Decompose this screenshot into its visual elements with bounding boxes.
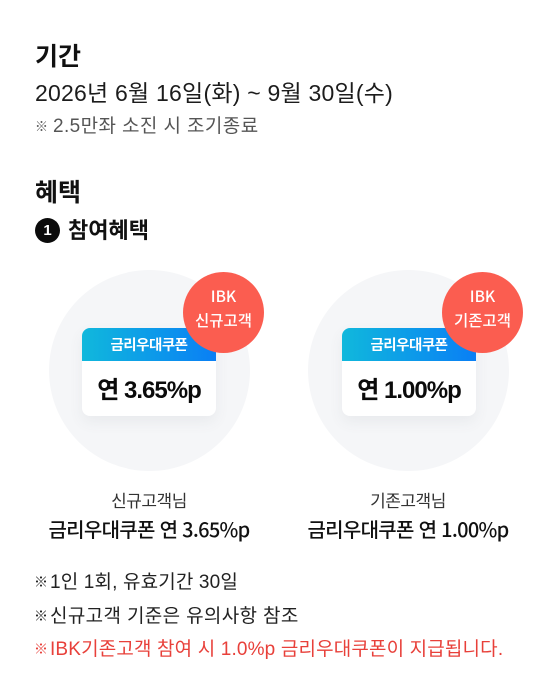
- note: new customer criteria: 신규고객 기준은 유의사항 참조: [50, 606, 299, 627]
- badge: IBK existing customer: [442, 272, 523, 353]
- coupon header: [342, 328, 476, 361]
- background circle: [308, 270, 509, 471]
- coupon header: 금리우대쿠폰: [370, 338, 448, 354]
- icon: number 1: 1: [43, 222, 52, 239]
- label: new customer: 신규고객님: [111, 492, 187, 511]
- note: existing customer coupon: ※: [34, 641, 48, 657]
- subheading: participation benefit: 참여혜택: [68, 218, 149, 243]
- badge: IBK new customer: 신규고객: [195, 309, 252, 331]
- coupon rate: 연 3.65%p: [97, 377, 201, 404]
- note: new customer criteria: ※: [34, 608, 48, 624]
- panel: new customer coupon: [49, 270, 264, 471]
- coupon card: [342, 328, 476, 416]
- badge: IBK existing customer: 기존고객: [454, 309, 511, 331]
- background circle: [49, 270, 250, 471]
- badge: IBK existing customer: IBK: [470, 285, 495, 307]
- coupon rate: 연 1.00%p: [357, 377, 461, 404]
- period note: 2.5만좌 소진 시 조기종료: [53, 116, 259, 137]
- badge: IBK new customer: IBK: [211, 285, 236, 307]
- coupon card: [82, 328, 216, 416]
- period dates: 2026년 6월 16일(화) ~ 9월 30일(수): [35, 80, 393, 106]
- icon: number 1: [35, 218, 60, 243]
- note: existing customer coupon: IBK기존고객 참여 시 1.0%p 금리우대쿠폰이 지급됩니다.: [50, 639, 503, 660]
- heading: period: 기간: [35, 43, 81, 71]
- value: new customer coupon: 금리우대쿠폰 연 3.65%p: [48, 514, 250, 543]
- badge: IBK new customer: [183, 272, 264, 353]
- coupon header: [82, 328, 216, 361]
- note: one per person: 1인 1회, 유효기간 30일: [50, 572, 238, 593]
- value: existing customer coupon: 금리우대쿠폰 연 1.00%p: [307, 514, 509, 543]
- coupon header: 금리우대쿠폰: [110, 338, 188, 354]
- period note: ※: [35, 119, 48, 134]
- note: one per person: ※: [34, 574, 48, 590]
- heading: benefits: 혜택: [35, 179, 81, 207]
- label: existing customer: 기존고객님: [370, 492, 446, 511]
- panel: existing customer coupon: [308, 270, 523, 471]
